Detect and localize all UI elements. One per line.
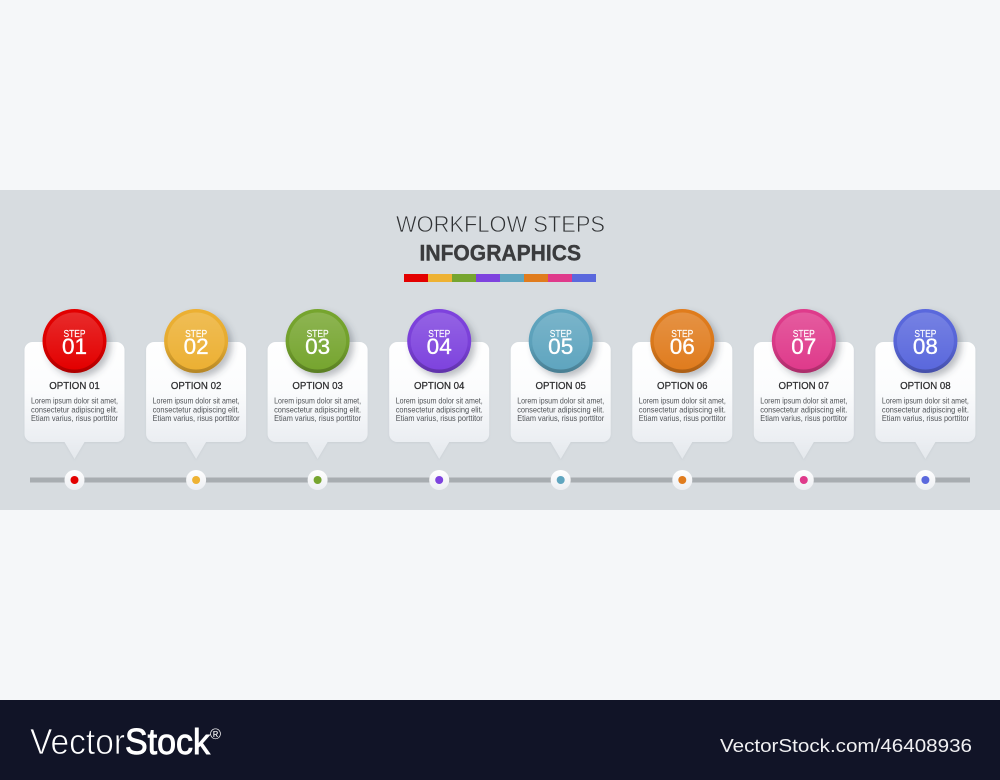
option body text: Etiam varius, risus porttitor	[639, 414, 726, 423]
footer logo bold: Stock	[125, 721, 211, 762]
timeline node	[186, 470, 206, 490]
step badge	[42, 309, 106, 373]
option body text: Lorem ipsum dolor sit amet,	[760, 396, 847, 406]
step badge: STEP	[428, 329, 450, 340]
option body text	[639, 396, 726, 423]
option body text: Etiam varius, risus porttitor	[274, 414, 361, 423]
option body text: Lorem ipsum dolor sit amet,	[396, 396, 483, 406]
footer bar	[0, 700, 1000, 780]
registered mark: ®	[210, 726, 221, 743]
panel: grey infographic band	[0, 190, 1000, 510]
option body text: Lorem ipsum dolor sit amet,	[274, 396, 361, 406]
option body text	[396, 396, 483, 423]
step badge	[893, 309, 957, 373]
option heading: OPTION 05	[535, 381, 586, 392]
option body text: Lorem ipsum dolor sit amet,	[517, 396, 604, 406]
title	[396, 211, 605, 266]
option body text	[31, 396, 118, 423]
option body text	[882, 396, 969, 423]
callout card	[146, 342, 246, 459]
option body text: Lorem ipsum dolor sit amet,	[882, 396, 969, 406]
option body text: Lorem ipsum dolor sit amet,	[639, 396, 726, 406]
option body text: consectetur adipiscing elit.	[31, 405, 118, 414]
step badge	[286, 309, 350, 373]
option body text: Etiam varius, risus porttitor	[882, 414, 969, 423]
heading: workflow steps: WORKFLOW STEPS	[396, 211, 605, 237]
panel: step 07	[754, 309, 854, 490]
step badge: STEP	[550, 329, 572, 340]
step badge: 02	[184, 334, 209, 359]
option heading: OPTION 03	[292, 381, 343, 392]
option body text: Etiam varius, risus porttitor	[153, 414, 240, 423]
option heading: OPTION 06	[657, 381, 708, 392]
panel: step 01	[24, 309, 124, 490]
timeline node	[672, 470, 692, 490]
timeline node	[429, 470, 449, 490]
step badge: STEP	[793, 329, 815, 340]
footer image id: VectorStock.com/46408936	[720, 736, 972, 756]
option body text: Lorem ipsum dolor sit amet,	[31, 396, 118, 406]
option body text	[274, 396, 361, 423]
callout card	[511, 342, 611, 459]
step badge: 03	[305, 334, 330, 359]
callout card	[24, 342, 124, 459]
option heading: OPTION 02	[171, 381, 222, 392]
step badge: 04	[427, 334, 452, 359]
option body text: Lorem ipsum dolor sit amet,	[153, 396, 240, 406]
step badge: STEP	[185, 329, 207, 340]
step badge	[772, 309, 836, 373]
callout card	[268, 342, 368, 459]
option body text: Etiam varius, risus porttitor	[517, 414, 604, 423]
option body text: consectetur adipiscing elit.	[760, 405, 847, 414]
option body text: Etiam varius, risus porttitor	[31, 414, 118, 423]
callout card	[632, 342, 732, 459]
colour legend bar	[404, 274, 596, 282]
step badge: 06	[670, 334, 695, 359]
callout card	[389, 342, 489, 459]
timeline node	[64, 470, 84, 490]
footer logo: Vector	[30, 721, 125, 762]
step badge	[529, 309, 593, 373]
timeline node	[794, 470, 814, 490]
option body text	[760, 396, 848, 423]
step badge: STEP	[64, 329, 86, 340]
option heading: OPTION 01	[49, 381, 100, 392]
option body text: consectetur adipiscing elit.	[639, 405, 726, 414]
step badge	[407, 309, 471, 373]
option body text: consectetur adipiscing elit.	[153, 405, 240, 414]
step badge	[650, 309, 714, 373]
option body text: Etiam varius, risus porttitor	[760, 414, 848, 423]
option body text: consectetur adipiscing elit.	[517, 405, 604, 414]
panel: step 08	[875, 309, 975, 490]
option body text	[517, 396, 604, 423]
option body text	[153, 396, 240, 423]
step badge: 01	[62, 334, 87, 359]
option heading: OPTION 08	[900, 381, 951, 392]
timeline node	[915, 470, 935, 490]
panel: step 02	[146, 309, 246, 490]
step badge: 05	[548, 334, 573, 359]
option heading: OPTION 07	[779, 381, 829, 392]
timeline line	[30, 478, 970, 482]
timeline node	[551, 470, 571, 490]
step badge: 08	[913, 334, 938, 359]
panel: step 04	[389, 309, 489, 490]
panel: step 03	[268, 309, 368, 490]
option body text: consectetur adipiscing elit.	[274, 405, 361, 414]
step badge	[164, 309, 228, 373]
step badge: STEP	[307, 329, 329, 340]
panel: step 05	[511, 309, 611, 490]
option body text: consectetur adipiscing elit.	[882, 405, 969, 414]
panel: step 06	[632, 309, 732, 490]
timeline node	[308, 470, 328, 490]
step badge: 07	[791, 334, 816, 359]
step badge: STEP	[914, 329, 937, 340]
option heading: OPTION 04	[414, 381, 465, 392]
option body text: consectetur adipiscing elit.	[396, 405, 483, 414]
heading: infographics: INFOGRAPHICS	[420, 240, 581, 266]
callout card	[754, 342, 854, 459]
option body text: Etiam varius, risus porttitor	[396, 414, 483, 423]
callout card	[875, 342, 975, 459]
step badge: STEP	[671, 329, 694, 340]
